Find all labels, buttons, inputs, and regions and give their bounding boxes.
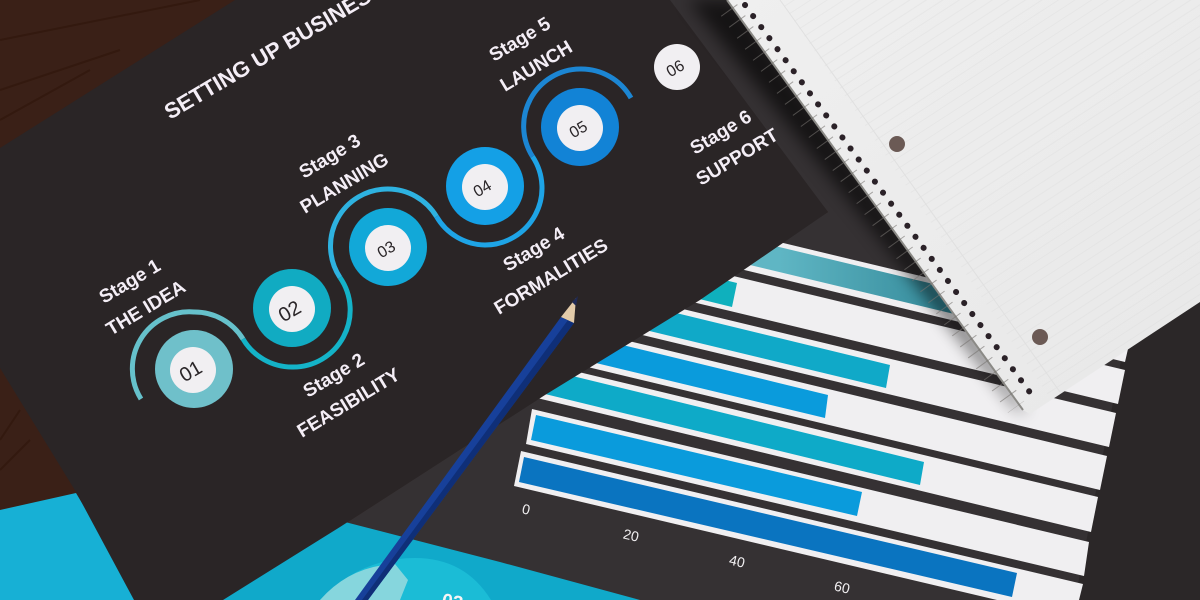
stage 04 marker: 04 xyxy=(471,177,495,201)
stage 04 marker xyxy=(446,147,524,225)
row 3 bar xyxy=(446,258,890,388)
row 4 bar xyxy=(446,303,828,418)
serpentine process timeline xyxy=(132,69,631,399)
bar chart xyxy=(442,163,1133,600)
blue sheet: bottom centre with pie xyxy=(200,522,640,600)
label: stage 2: FEASIBILITY xyxy=(294,364,404,442)
main dark sheet xyxy=(0,0,828,600)
row 5 track xyxy=(442,341,1098,532)
stage 01 marker: 01 xyxy=(176,357,206,387)
hole top xyxy=(889,136,905,152)
label: stage 3: Stage 3 xyxy=(296,130,365,183)
label: stage 3: PLANNING xyxy=(297,149,393,218)
axis label 0: 0 xyxy=(521,500,532,518)
axis label 60: 60 xyxy=(833,578,852,597)
label: stage 4: FORMALITIES xyxy=(491,235,612,319)
label: stage 5 xyxy=(486,13,576,96)
row 6 bar xyxy=(531,415,862,516)
row 1 bar xyxy=(446,168,1000,324)
stage 03 marker xyxy=(349,208,427,286)
stage 05 marker: 05 xyxy=(567,118,591,142)
row 7 track xyxy=(514,451,1083,600)
stage 06 marker: 06 xyxy=(664,57,688,81)
stage 02 marker: 02 xyxy=(275,297,305,327)
row 3 track xyxy=(442,253,1116,447)
row 2 bar xyxy=(446,213,737,307)
margin line xyxy=(780,0,1060,392)
stage 03 marker: 03 xyxy=(375,238,399,262)
stage 06 marker xyxy=(654,44,700,90)
label: stage 5: LAUNCH xyxy=(497,37,576,96)
timeline segment 5 xyxy=(524,69,631,156)
spine wire xyxy=(727,0,1023,410)
axis label 40: 40 xyxy=(728,552,747,571)
stage 02 marker xyxy=(253,269,331,347)
spiral binding wires xyxy=(729,5,1037,407)
timeline segment 3 xyxy=(331,189,436,278)
label: stage 4: Stage 4 xyxy=(500,223,569,276)
timeline segment 1 xyxy=(132,312,243,399)
hole bottom xyxy=(1032,329,1048,345)
notebook shadow xyxy=(688,0,1027,412)
timeline segment 4 xyxy=(436,156,542,245)
row 4 track xyxy=(442,298,1107,490)
row 6 track xyxy=(526,409,1089,576)
timeline segment 2 xyxy=(243,278,350,367)
blue sheet: bottom left xyxy=(0,493,140,600)
label: stage 5: Stage 5 xyxy=(486,13,555,66)
row 7 bar xyxy=(519,457,1017,597)
dark chart sheet xyxy=(340,0,1200,600)
pie slice xyxy=(320,564,408,600)
label: stage 2: Stage 2 xyxy=(300,349,369,402)
axis label 20: 20 xyxy=(622,526,641,545)
label: stage 6: Stage 6 xyxy=(687,106,756,159)
notebook xyxy=(727,0,1200,414)
label: stage 1: Stage 1 xyxy=(96,255,165,308)
pie chart circle xyxy=(320,558,491,600)
row 1 track xyxy=(442,163,1133,362)
row 2 track xyxy=(442,208,1125,404)
dark area right of the chart xyxy=(1075,300,1200,600)
pencil xyxy=(355,296,578,600)
label: stage 1 xyxy=(96,255,190,340)
label: stage 6: SUPPORT xyxy=(693,125,783,190)
stage 01 marker xyxy=(155,330,233,408)
label: stage 1: THE IDEA xyxy=(103,276,190,340)
row 5 bar xyxy=(446,346,924,485)
stage 05 marker xyxy=(541,88,619,166)
